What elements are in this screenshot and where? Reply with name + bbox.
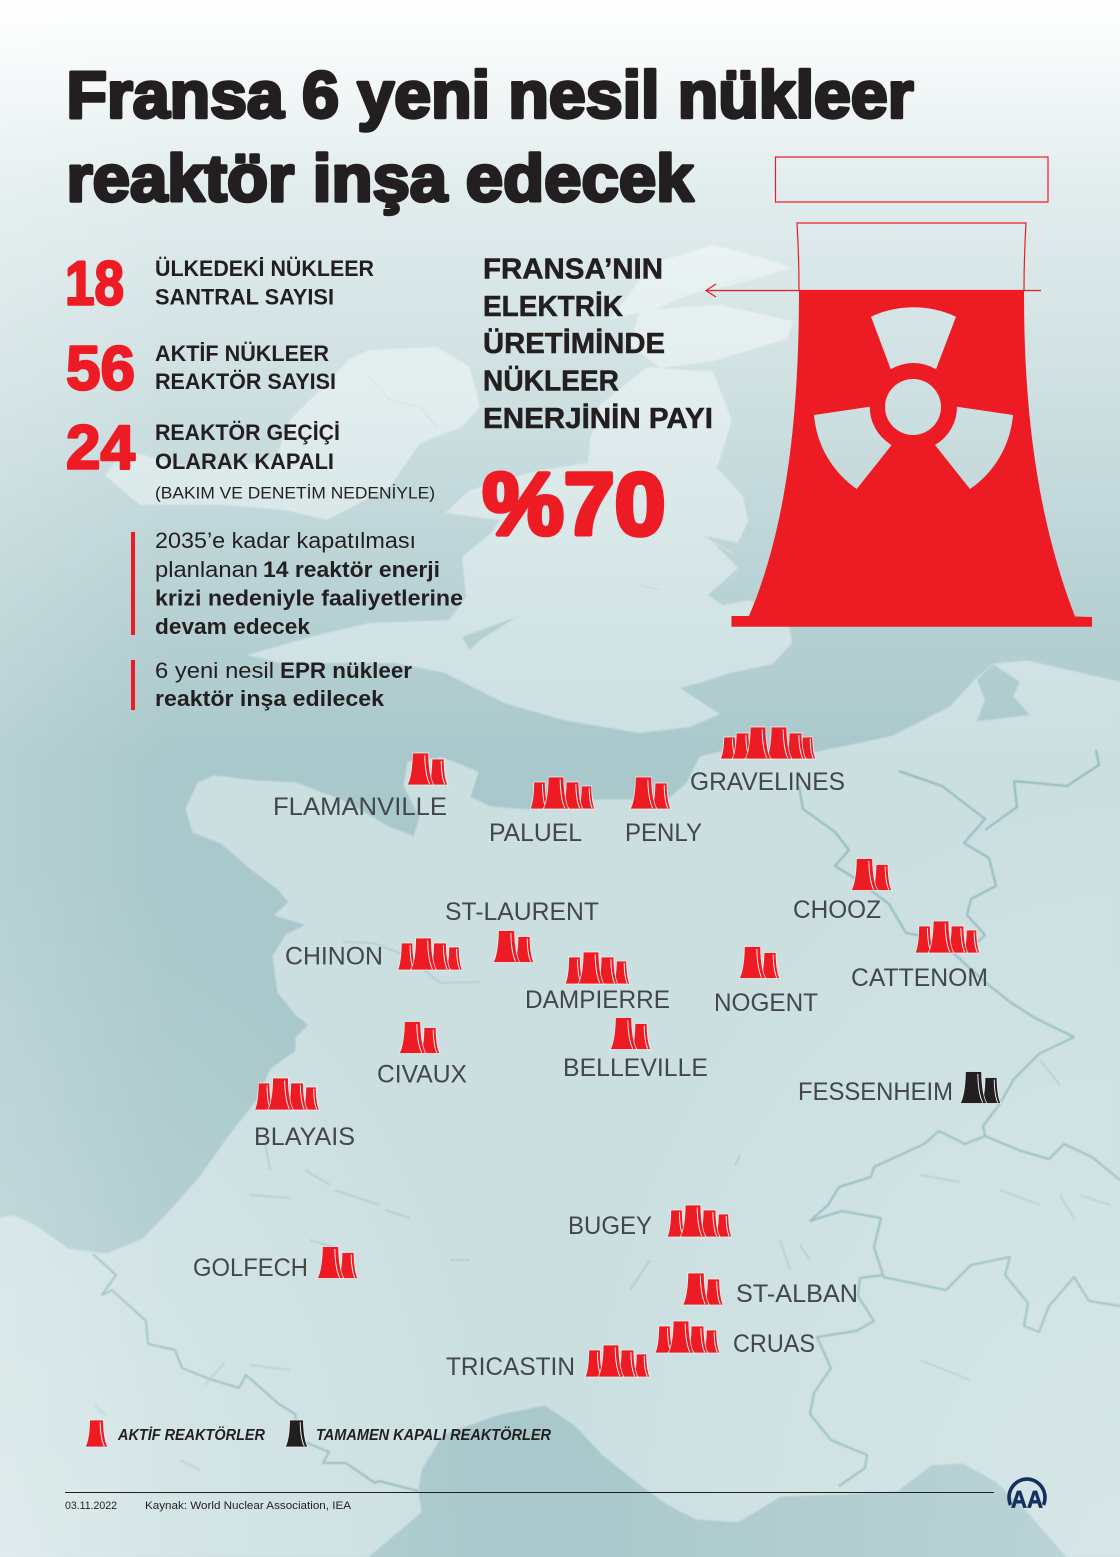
stat: 18 plants: 18: [65, 250, 124, 318]
share heading: NÜKLEER: [483, 364, 619, 398]
station: Paluel: PALUEL: [489, 819, 582, 847]
note: 14 reactors: 2035’e kadar kapatılması: [155, 528, 416, 553]
title: [66, 58, 914, 215]
land: continental Europe: [0, 661, 1120, 1557]
borders and rivers: [93, 750, 1120, 1491]
share heading: [483, 254, 713, 435]
stat: 24 temporarily closed: 24: [66, 414, 136, 482]
stat: 56 active reactors: AKTİF NÜKLEER: [155, 341, 329, 366]
station: Blayais: BLAYAIS: [254, 1123, 355, 1151]
note: 14 reactors: [131, 528, 463, 639]
note: 14 reactors: krizi nedeniyle faaliyetlerine: [155, 586, 463, 610]
station: Golfech: [193, 1246, 358, 1282]
note: 6 EPR reactors: EPR nükleer: [280, 658, 412, 683]
station: Belleville: [563, 1018, 708, 1082]
station: Gravelines: [690, 727, 845, 796]
station: Belleville: BELLEVILLE: [563, 1054, 708, 1082]
station: St-Alban: [682, 1273, 858, 1308]
legend: fully closed reactors: TAMAMEN KAPALI REAKTÖRLER: [316, 1427, 552, 1444]
station: Nogent: [714, 946, 818, 1017]
note: 14 reactors: devam edecek: [155, 614, 311, 639]
stat: 24 temporarily closed: OLARAK KAPALI: [155, 449, 334, 474]
land: Wales and south-west peninsula: [105, 347, 480, 520]
note: 14 reactors: planlanan: [155, 557, 258, 582]
footer: Kaynak: World Nuclear Association, IEA: [145, 1500, 352, 1512]
footer: [65, 1492, 994, 1512]
station: Fessenheim (closed): [798, 1072, 1001, 1106]
station: Dampierre: DAMPIERRE: [525, 986, 670, 1014]
legend: active reactors: AKTİF REAKTÖRLER: [117, 1427, 266, 1444]
station: Blayais: [254, 1078, 355, 1151]
station: Chooz: CHOOZ: [793, 896, 881, 924]
station: Nogent: NOGENT: [714, 989, 818, 1017]
note: 6 EPR reactors: reaktör inşa edilecek: [155, 686, 385, 711]
icon: AA logo: AA: [1011, 1486, 1043, 1514]
title: Fransa 6 yeni nesil nükleer: [66, 58, 914, 132]
stat: 24 temporarily closed: [66, 414, 435, 502]
station: Chinon: [285, 938, 462, 970]
stat: 24 temporarily closed: (BAKIM VE DENETİM NEDENİYLE): [155, 484, 435, 502]
footer: 03.11.2022: [65, 1500, 117, 1512]
land: Great Britain south: [247, 367, 792, 733]
station: Gravelines: GRAVELINES: [690, 768, 845, 796]
stat: 56 active reactors: [66, 334, 336, 404]
station: Flamanville: [273, 753, 448, 821]
steam outline box: [776, 157, 1048, 202]
station: Cattenom: [851, 921, 988, 992]
legend: [85, 1420, 552, 1447]
note: 6 EPR reactors: 6 yeni nesil: [155, 658, 274, 683]
stat: 18 plants: [65, 250, 374, 318]
share heading: ELEKTRİK: [483, 291, 623, 323]
station: Penly: [625, 777, 702, 847]
light fades: [0, 0, 1120, 760]
station: Civaux: [377, 1022, 467, 1088]
share heading: ÜRETİMİNDE: [483, 327, 665, 360]
sea: Dutch inlets: [977, 664, 1030, 721]
filled tower with radiation symbol: [732, 290, 1092, 627]
empty tower outline: [797, 223, 1026, 290]
station: Penly: PENLY: [625, 819, 702, 847]
station: Paluel: [489, 777, 595, 847]
arrow to share label: [706, 284, 1041, 297]
station: Cruas: CRUAS: [733, 1330, 815, 1358]
cooling tower gauge chart: [706, 157, 1092, 627]
stat: 18 plants: SANTRAL SAYISI: [155, 284, 334, 310]
note: 14 reactors: 14 reaktör enerji: [263, 557, 440, 582]
station: St-Laurent: [445, 898, 599, 962]
station: Flamanville: FLAMANVILLE: [273, 793, 447, 821]
station: Golfech: GOLFECH: [193, 1254, 308, 1282]
station: Fessenheim (closed): FESSENHEIM: [798, 1078, 953, 1106]
station: Chooz: [793, 858, 892, 924]
station: Chinon: CHINON: [285, 942, 383, 970]
title: reaktör inşa edecek: [66, 141, 694, 215]
station: Tricastin: [446, 1345, 650, 1381]
station: St-Laurent: ST-LAURENT: [445, 898, 599, 926]
stat: 56 active reactors: REAKTÖR SAYISI: [155, 369, 336, 394]
stat: 56 active reactors: 56: [66, 334, 135, 404]
station: Bugey: [568, 1205, 732, 1240]
stat: 18 plants: ÜLKEDEKİ NÜKLEER: [155, 256, 374, 281]
station: St-Alban: ST-ALBAN: [736, 1280, 858, 1308]
station: Dampierre: [525, 952, 670, 1014]
station: Civaux: CIVAUX: [377, 1060, 467, 1088]
stat: 24 temporarily closed: REAKTÖR GEÇİÇİ: [155, 420, 340, 445]
station: Cattenom: CATTENOM: [851, 964, 988, 992]
legend: active reactors: [85, 1420, 266, 1447]
share heading: FRANSA’NIN: [483, 254, 663, 286]
land: northern Britain: [630, 305, 793, 368]
share heading: ENERJİNİN PAYI: [483, 403, 713, 435]
station: Bugey: BUGEY: [568, 1212, 652, 1240]
share value: %70: [482, 454, 666, 554]
station: Tricastin: TRICASTIN: [446, 1353, 575, 1381]
legend: fully closed reactors: [285, 1420, 552, 1447]
station: Cruas: [655, 1321, 815, 1358]
note: 6 EPR reactors: [131, 658, 412, 711]
